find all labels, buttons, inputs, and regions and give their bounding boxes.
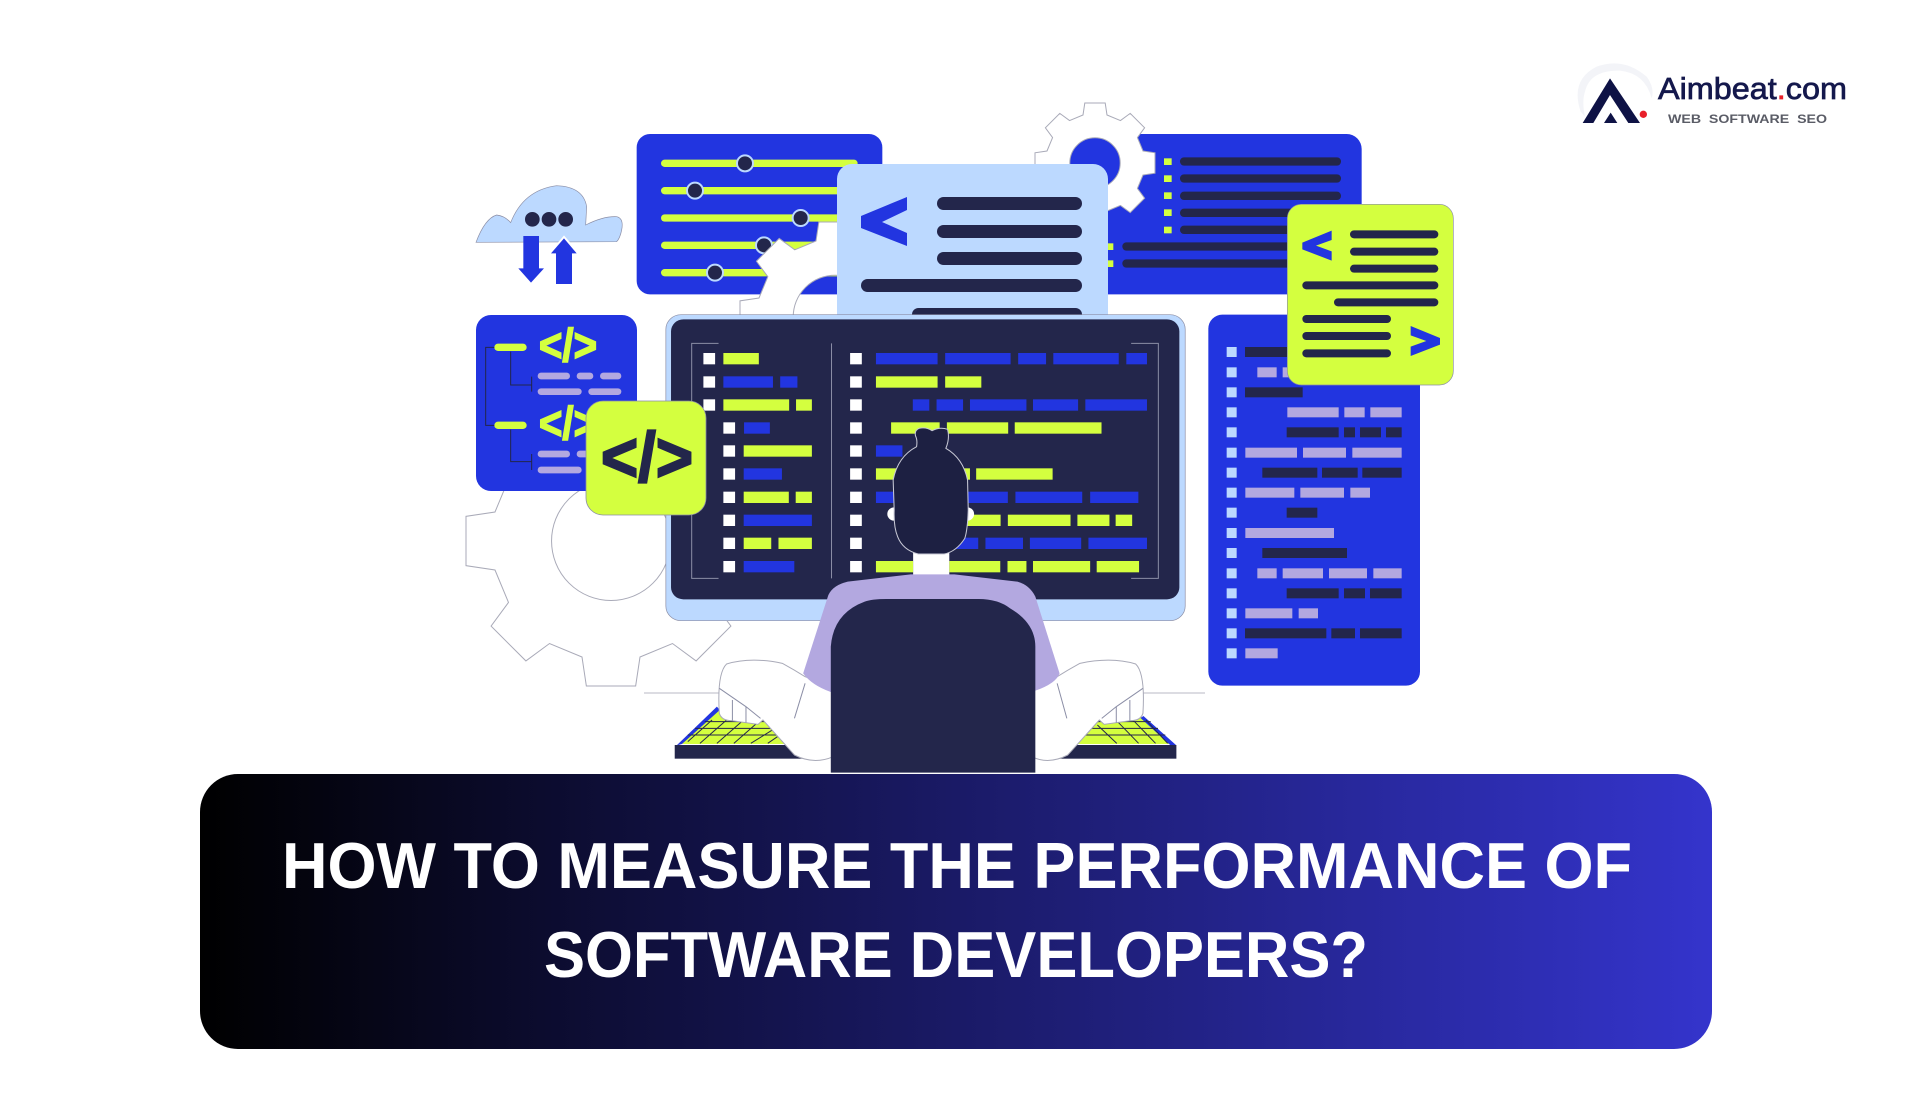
panel: code list right	[1208, 315, 1420, 686]
logo tagline: WEB SOFTWARE SEO	[1668, 112, 1827, 126]
right column code bars	[876, 353, 1147, 572]
icon: large gear bottom left	[466, 396, 756, 686]
line markers	[1227, 347, 1237, 658]
logo wordmark: Aimbeat.com	[1658, 72, 1847, 106]
left column line markers	[703, 353, 735, 572]
icon: cloud with upload and download arrows	[476, 186, 622, 284]
icon: gear top right	[1035, 103, 1155, 223]
icon: lime code tag chip: </>	[601, 418, 693, 496]
right column line markers	[850, 353, 862, 572]
body, keyboards, arms and chair	[675, 574, 1176, 773]
code bars	[1245, 347, 1402, 658]
chair	[831, 599, 1035, 773]
icon: second code tag: </>	[539, 397, 597, 449]
panel: light blue code window	[837, 164, 1108, 334]
icon: gear behind code window	[740, 222, 930, 412]
logo: Aimbeat	[1578, 63, 1847, 126]
logo mark	[1578, 63, 1653, 123]
right keyboard	[1059, 715, 1176, 759]
left arm	[719, 660, 833, 760]
panel: list top right	[1060, 134, 1362, 294]
head, ears and neck	[887, 428, 974, 576]
desk lines	[644, 692, 1205, 694]
icon: first code tag: </>	[539, 319, 597, 371]
right arm	[1032, 660, 1143, 760]
title line 1: HOW TO MEASURE THE PERFORMANCE OF	[282, 829, 1632, 902]
icon: lime code tag chip	[586, 401, 706, 515]
panel: lime code window	[1287, 204, 1453, 385]
title banner	[200, 774, 1712, 1049]
panel: monitor with code editor	[666, 315, 1185, 621]
title line 2: SOFTWARE DEVELOPERS?	[544, 918, 1368, 991]
illustration: developer seen from behind at desk	[644, 428, 1205, 773]
shirt	[803, 574, 1060, 692]
panel: code tree left	[476, 315, 637, 491]
left column code bars	[723, 353, 812, 572]
panel: sliders	[637, 134, 882, 294]
left keyboard	[675, 707, 806, 759]
